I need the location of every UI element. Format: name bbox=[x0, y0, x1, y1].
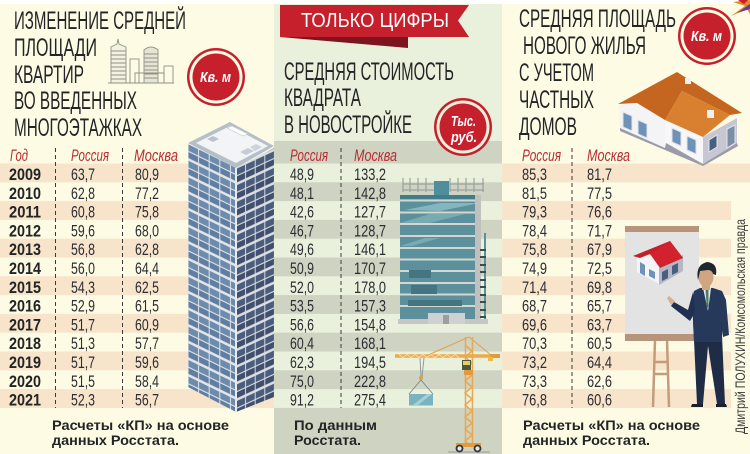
column: Russia housing area: 73,2 bbox=[522, 353, 547, 372]
column: years: 2010 bbox=[9, 185, 41, 203]
column: Moscow housing area: 69,8 bbox=[587, 278, 612, 297]
column: years: 2018 bbox=[9, 335, 41, 353]
badge: square metres: Кв. м bbox=[200, 69, 231, 86]
credit: author and publication: Дмитрий ПОЛУХИН/Комсомольская правда bbox=[732, 219, 748, 434]
badge: square metres right bbox=[678, 7, 736, 65]
column: Moscow housing area: 65,7 bbox=[587, 297, 612, 316]
source note: left: Расчеты «КП» на основе bbox=[52, 417, 229, 433]
column: Moscow price: 128,7 bbox=[354, 221, 386, 240]
column: Moscow price: 142,8 bbox=[354, 184, 386, 203]
column: Russia price: 56,6 bbox=[290, 315, 314, 334]
column: years: 2019 bbox=[9, 354, 41, 372]
column: Moscow price: 157,3 bbox=[354, 297, 386, 316]
heading: left bbox=[14, 5, 186, 142]
column: Russia housing area: 68,7 bbox=[522, 297, 547, 316]
column: Russia flat area: 56,8 bbox=[71, 240, 95, 259]
column: Russia flat area: 51,7 bbox=[71, 315, 95, 334]
table header: right bbox=[522, 146, 630, 165]
column: Russia housing area: 75,8 bbox=[522, 240, 547, 259]
illustration: orange-roof house bbox=[618, 72, 742, 166]
column: Russia housing area: 76,8 bbox=[522, 391, 547, 410]
column: Russia price: 91,2 bbox=[290, 391, 314, 410]
column: years: 2011 bbox=[9, 204, 41, 222]
heading: left: ИЗМЕНЕНИЕ СРЕДНЕЙ bbox=[14, 5, 186, 35]
column: Russia flat area: 60,8 bbox=[71, 203, 95, 222]
column: Moscow housing area: 60,5 bbox=[587, 334, 612, 353]
column: Moscow price: 222,8 bbox=[354, 372, 386, 391]
panel: price per square metre bbox=[274, 4, 502, 454]
table header: middle: Москва bbox=[354, 146, 397, 165]
table header: right: Россия bbox=[522, 146, 561, 165]
column: years: 2021 bbox=[9, 392, 41, 410]
column: Russia price: 50,9 bbox=[290, 259, 314, 278]
column: Moscow housing area: 64,4 bbox=[587, 353, 612, 372]
column: Russia flat area: 54,3 bbox=[71, 278, 95, 297]
heading: left: ВО ВВЕДЕННЫХ bbox=[14, 87, 137, 115]
heading: right: С УЧЕТОМ bbox=[519, 59, 594, 87]
column: Russia price: 52,0 bbox=[290, 278, 314, 297]
heading: right: ЧАСТНЫХ bbox=[519, 86, 594, 114]
illustration: isometric tower bbox=[188, 122, 274, 412]
source note: middle bbox=[294, 417, 377, 448]
column: Moscow housing area: 71,7 bbox=[587, 221, 612, 240]
column: Russia flat area: 51,7 bbox=[71, 353, 95, 372]
column: Russia flat area: 56,0 bbox=[71, 259, 95, 278]
column: Russia price: 46,7 bbox=[290, 221, 314, 240]
column: Russia housing area bbox=[522, 165, 547, 410]
column: Russia price: 60,4 bbox=[290, 334, 314, 353]
column: years: 2014 bbox=[9, 260, 42, 278]
column: Russia flat area: 52,9 bbox=[71, 297, 95, 316]
heading: middle: В НОВОСТРОЙКЕ bbox=[284, 109, 412, 139]
table header: middle bbox=[290, 146, 397, 165]
illustration: building under construction bbox=[398, 178, 488, 324]
panel: new housing area including private houses bbox=[502, 0, 750, 454]
table header: left: Год bbox=[10, 146, 28, 165]
source note: middle: Росстата. bbox=[294, 432, 361, 448]
heading: right bbox=[519, 5, 676, 141]
heading: middle bbox=[284, 58, 454, 139]
heading: right: НОВОГО ЖИЛЬЯ bbox=[523, 32, 646, 60]
column: Russia price: 42,6 bbox=[290, 203, 314, 222]
table header: right: Москва bbox=[587, 146, 630, 165]
column: Moscow flat area: 60,9 bbox=[135, 315, 159, 334]
badge: square metres right: Кв. м bbox=[691, 28, 722, 45]
source note: right bbox=[523, 417, 700, 448]
column: Moscow flat area: 77,2 bbox=[135, 184, 159, 203]
column: Russia flat area: 51,5 bbox=[71, 372, 95, 391]
column: Russia price bbox=[290, 165, 314, 410]
column: Moscow housing area: 67,9 bbox=[587, 240, 612, 259]
column: Moscow price: 146,1 bbox=[354, 240, 386, 259]
heading: right: ДОМОВ bbox=[519, 113, 577, 141]
heading: middle: КВАДРАТА bbox=[284, 84, 361, 112]
banner: only numbers bbox=[280, 5, 469, 48]
column: Russia price: 48,1 bbox=[290, 184, 314, 203]
column: years: 2009 bbox=[9, 166, 41, 184]
column: Moscow price: 133,2 bbox=[354, 165, 386, 184]
logo mark: corner star bbox=[731, 0, 750, 16]
column: years: 2020 bbox=[9, 373, 41, 391]
column: Russia housing area: 70,3 bbox=[522, 334, 547, 353]
heading: left: ПЛОЩАДИ bbox=[14, 34, 97, 62]
column: Russia flat area bbox=[71, 165, 95, 410]
column: Russia flat area: 51,3 bbox=[71, 334, 95, 353]
column: Russia price: 49,6 bbox=[290, 240, 314, 259]
panel: average flat area in high-rises bbox=[0, 4, 274, 454]
column: Russia price: 75,0 bbox=[290, 372, 314, 391]
column: Moscow price: 194,5 bbox=[354, 353, 386, 372]
column: years: 2015 bbox=[9, 279, 41, 297]
column: Moscow flat area: 58,4 bbox=[135, 372, 159, 391]
column: Moscow housing area: 81,7 bbox=[587, 165, 612, 184]
column: Moscow price bbox=[354, 165, 386, 410]
column: Moscow housing area bbox=[587, 165, 612, 410]
column: Moscow flat area: 61,5 bbox=[135, 297, 159, 316]
table header: middle: Россия bbox=[290, 146, 328, 165]
banner: only numbers: ТОЛЬКО ЦИФРЫ bbox=[301, 10, 449, 32]
column: Russia housing area: 73,3 bbox=[522, 372, 547, 391]
column: Moscow price: 127,7 bbox=[354, 203, 386, 222]
column: years bbox=[9, 166, 42, 410]
column: Russia housing area: 69,6 bbox=[522, 315, 547, 334]
badge: square metres bbox=[187, 48, 245, 106]
column: years: 2017 bbox=[9, 316, 41, 334]
heading: left: КВАРТИР bbox=[14, 61, 84, 89]
column: Russia housing area: 78,4 bbox=[522, 221, 547, 240]
illustration: tower crane bbox=[395, 337, 500, 453]
column: Moscow flat area: 59,6 bbox=[135, 353, 159, 372]
column: Russia price: 53,5 bbox=[290, 297, 314, 316]
column: Moscow housing area: 62,6 bbox=[587, 372, 612, 391]
column: Russia flat area: 62,8 bbox=[71, 184, 95, 203]
column: Russia flat area: 63,7 bbox=[71, 165, 95, 184]
column: Moscow flat area: 62,5 bbox=[135, 278, 159, 297]
illustration: easel with house bbox=[625, 226, 699, 407]
table header: left: Москва bbox=[134, 146, 178, 165]
column: Russia housing area: 85,3 bbox=[522, 165, 547, 184]
column: Russia price: 62,3 bbox=[290, 353, 314, 372]
column: Moscow housing area: 76,6 bbox=[587, 203, 612, 222]
column: Russia housing area: 79,3 bbox=[522, 203, 547, 222]
column: years: 2013 bbox=[9, 241, 41, 259]
column: Russia housing area: 71,4 bbox=[522, 278, 547, 297]
source note: left: данных Росстата. bbox=[52, 432, 179, 448]
column: Moscow flat area: 62,8 bbox=[135, 240, 159, 259]
source note: left bbox=[52, 417, 229, 448]
column: Russia price: 48,9 bbox=[290, 165, 314, 184]
column: Moscow flat area: 56,7 bbox=[135, 391, 159, 410]
column: Moscow price: 275,4 bbox=[354, 391, 386, 410]
heading: middle: СРЕДНЯЯ СТОИМОСТЬ bbox=[284, 58, 454, 86]
column: Russia flat area: 52,3 bbox=[71, 391, 95, 410]
column: years: 2012 bbox=[9, 222, 41, 240]
column: Moscow price: 168,1 bbox=[354, 334, 386, 353]
illustration: presenter in suit bbox=[667, 262, 729, 407]
source note: right: данных Росстата. bbox=[523, 432, 650, 448]
badge: thousand roubles: Тыс. bbox=[451, 113, 476, 130]
column: Moscow flat area: 75,8 bbox=[135, 203, 159, 222]
column: Moscow price: 178,0 bbox=[354, 278, 386, 297]
column: Moscow flat area: 68,0 bbox=[135, 221, 159, 240]
column: Moscow housing area: 77,5 bbox=[587, 184, 612, 203]
source note: middle: По данным bbox=[294, 417, 377, 433]
column: Moscow housing area: 60,6 bbox=[587, 391, 612, 410]
column: Moscow price: 170,7 bbox=[354, 259, 386, 278]
column: Moscow flat area bbox=[135, 165, 159, 410]
column: Moscow price: 154,8 bbox=[354, 315, 386, 334]
badge: thousand roubles bbox=[434, 98, 492, 156]
column: years: 2016 bbox=[9, 298, 41, 316]
table header: left bbox=[10, 146, 178, 165]
column: Moscow housing area: 63,7 bbox=[587, 315, 612, 334]
badge: thousand roubles: руб. bbox=[450, 129, 477, 146]
column: Russia housing area: 74,9 bbox=[522, 259, 547, 278]
column: Moscow housing area: 72,5 bbox=[587, 259, 612, 278]
column: Russia flat area: 59,6 bbox=[71, 221, 95, 240]
column: Moscow flat area: 57,7 bbox=[135, 334, 159, 353]
column: Moscow flat area: 64,4 bbox=[135, 259, 159, 278]
source note: right: Расчеты «КП» на основе bbox=[523, 417, 700, 433]
icon: skyline outline bbox=[108, 39, 174, 83]
column: Moscow flat area: 80,9 bbox=[135, 165, 159, 184]
table header: left: Россия bbox=[71, 146, 109, 165]
heading: left: МНОГОЭТАЖКАХ bbox=[14, 114, 142, 142]
column: Russia housing area: 81,5 bbox=[522, 184, 547, 203]
